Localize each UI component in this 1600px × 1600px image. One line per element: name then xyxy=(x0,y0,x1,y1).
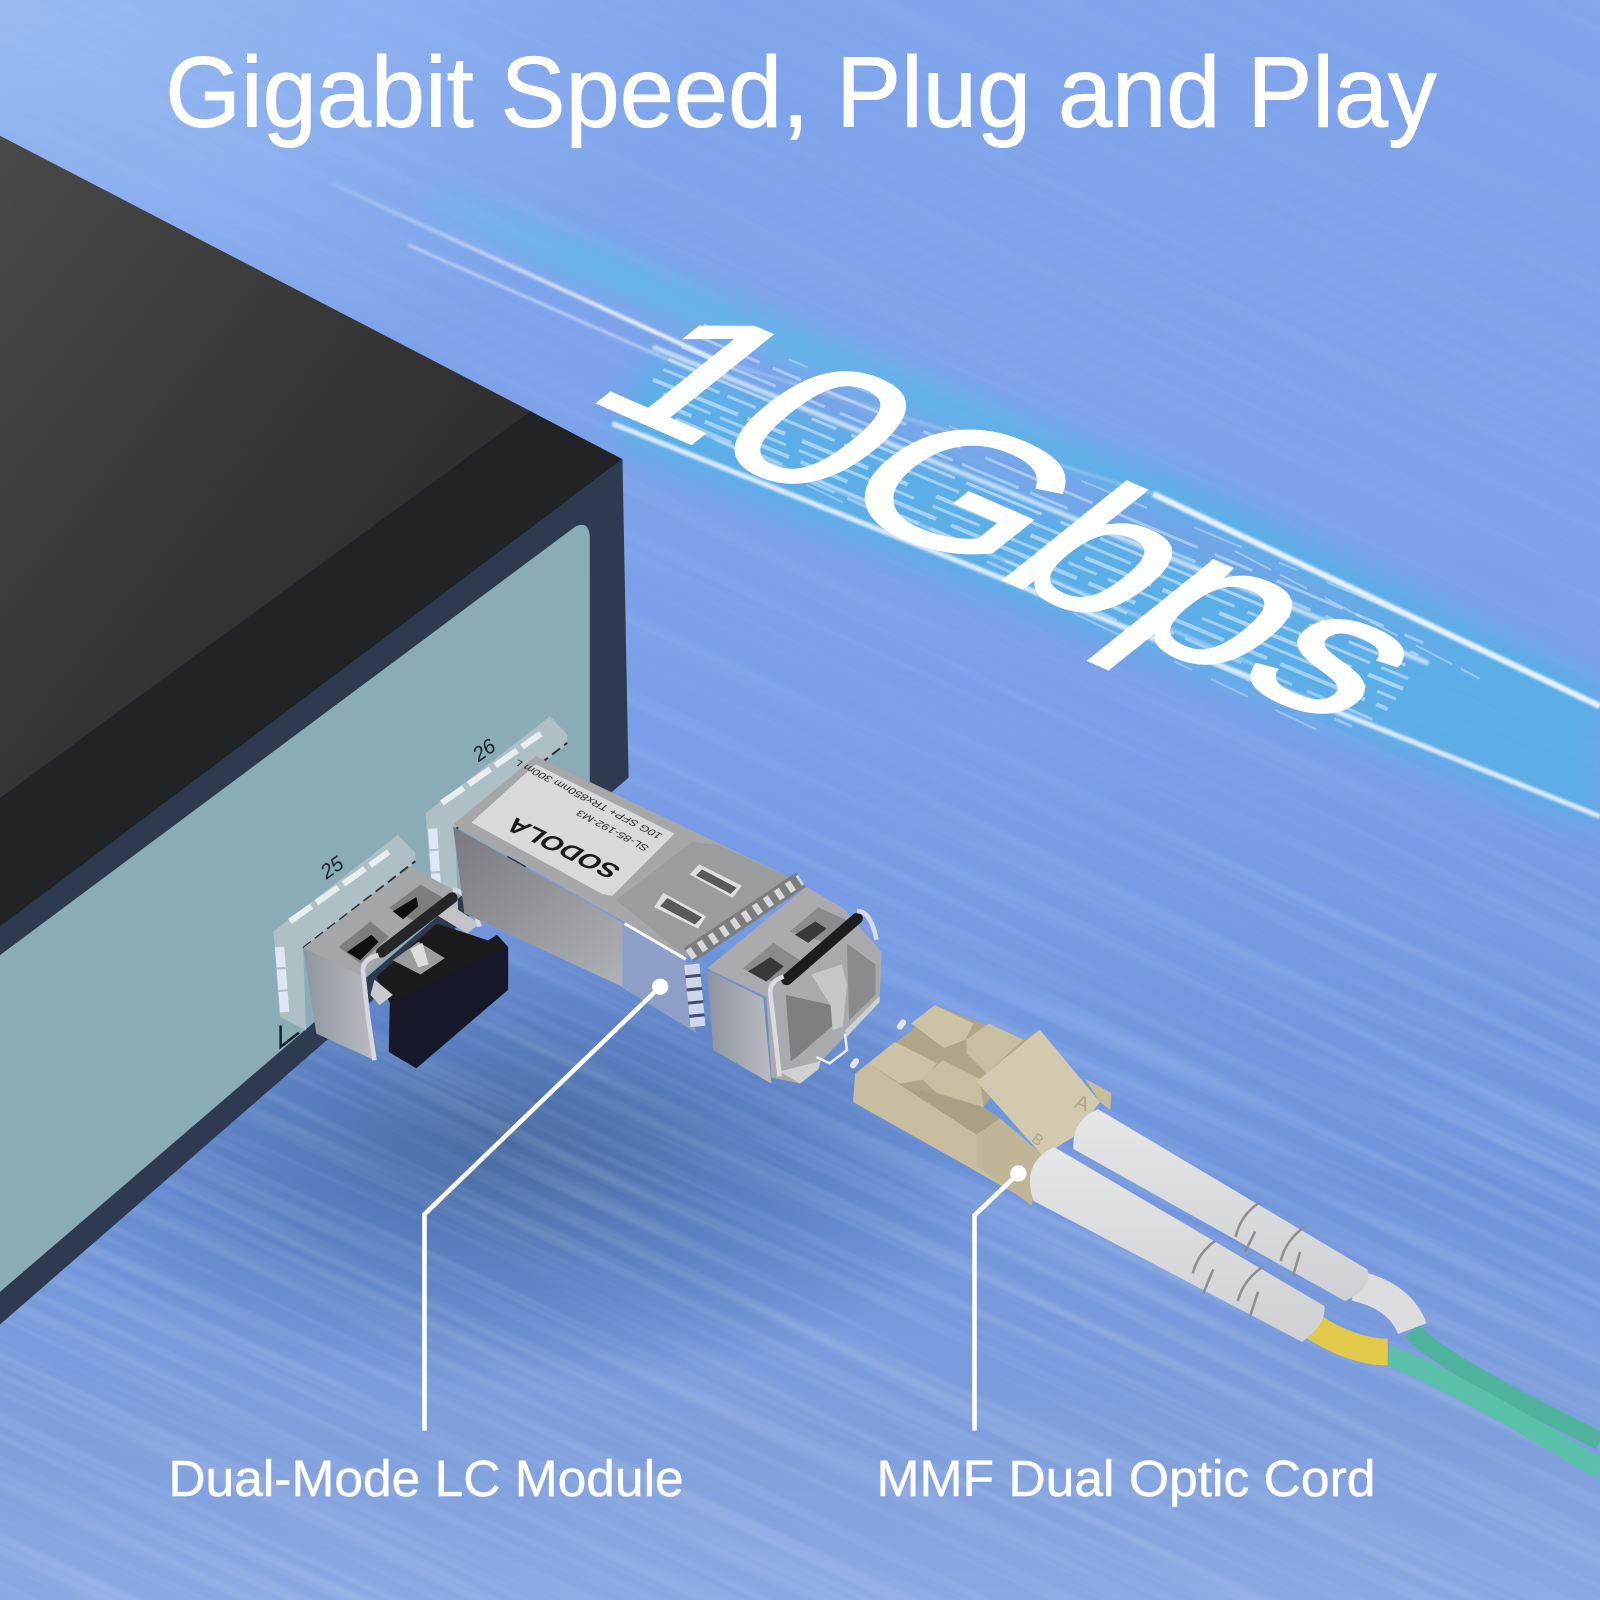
connector rear plate xyxy=(1085,1079,1111,1110)
tab upper xyxy=(690,864,742,898)
callout label left: Dual-Mode LC Module xyxy=(168,1450,684,1507)
port label 26: 26 xyxy=(468,735,501,767)
network switch xyxy=(0,136,629,1324)
speed text: 10Gbps: 10Gbps xyxy=(546,273,1491,754)
connector latch upper rear xyxy=(966,1023,1023,1073)
model line: SL-85-192-M3 xyxy=(574,808,652,852)
upper boot xyxy=(1073,1109,1368,1301)
green cord lower xyxy=(1388,1355,1600,1469)
tab lower xyxy=(654,893,706,929)
connector base silhouette xyxy=(868,1005,1040,1107)
callout: MMF Dual Optic Cord xyxy=(877,1165,1376,1507)
fibre jacket cords xyxy=(1310,1286,1600,1469)
module top face xyxy=(453,756,799,957)
connector dots xyxy=(853,1022,903,1065)
callout: Dual-Mode LC Module xyxy=(168,979,684,1507)
port label 25: 25 xyxy=(316,852,349,884)
brand name: SODOLA xyxy=(499,813,627,883)
EMI fingers xyxy=(689,880,801,1027)
connector flange xyxy=(977,1030,1100,1156)
connector body side xyxy=(853,1063,1027,1200)
connector latch lower rear xyxy=(921,1060,984,1107)
title: Gigabit Speed, Plug and Play xyxy=(165,37,1437,149)
yellow fibre xyxy=(1310,1324,1388,1352)
LC connector xyxy=(853,1005,1111,1205)
connector collar xyxy=(977,1118,1043,1205)
green cord upper xyxy=(1412,1331,1600,1441)
module rear shell plate xyxy=(616,842,799,957)
data bars behind speed text xyxy=(653,324,1480,730)
cable boots xyxy=(1030,1109,1368,1342)
callout label right: MMF Dual Optic Cord xyxy=(877,1450,1376,1507)
lower boot xyxy=(1030,1147,1325,1342)
module blue-tinted mid section xyxy=(622,922,696,1033)
module side face xyxy=(453,827,624,988)
SFP cage port 25 xyxy=(273,835,415,1047)
connector shadow step xyxy=(900,1085,1000,1135)
switch front band xyxy=(0,411,622,929)
speed light streaks xyxy=(332,184,1600,816)
switch navy frame xyxy=(0,459,629,1324)
SFP cage port 26 xyxy=(426,716,567,911)
connector marking A: A xyxy=(1072,1091,1092,1117)
transceiver installed in port 25 xyxy=(303,866,480,1060)
module front housing xyxy=(707,887,882,1084)
SFP module xyxy=(453,756,882,1084)
grey fibre xyxy=(1355,1286,1412,1329)
switch teal face xyxy=(0,525,590,1292)
module label sticker xyxy=(471,757,674,896)
spec line: 10G SFP+ TRx850nm 300m L xyxy=(512,757,665,840)
connector latch lower front xyxy=(868,1042,937,1084)
switch top cover xyxy=(0,136,533,802)
dust plug in port 25 xyxy=(377,923,508,1068)
module white edge xyxy=(624,923,686,959)
connector marking B: B xyxy=(1028,1130,1046,1150)
connector latch upper front xyxy=(911,1005,973,1048)
